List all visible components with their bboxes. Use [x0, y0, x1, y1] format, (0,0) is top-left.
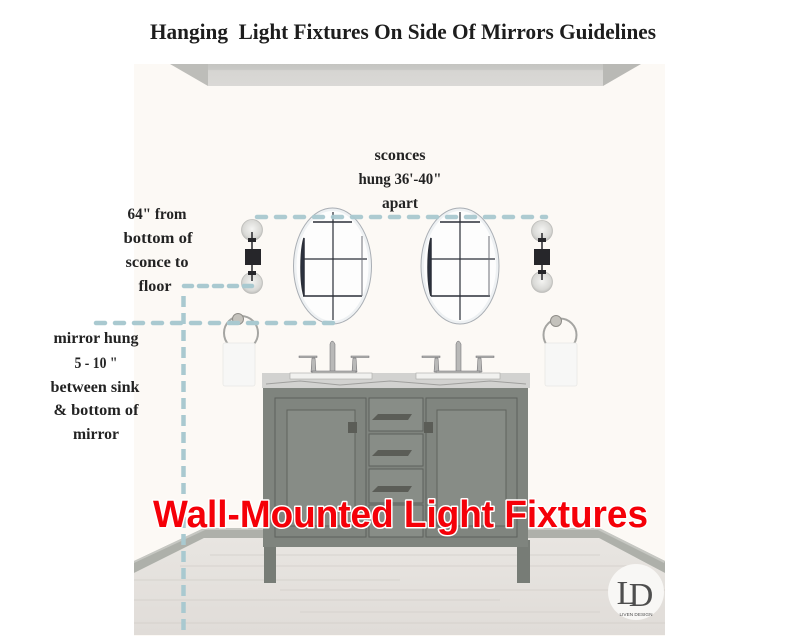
drawer pulls and door knobs	[348, 414, 433, 492]
right door	[426, 398, 517, 537]
callout: sconce height: sconce to	[126, 254, 188, 271]
measurement guide: sconce spacing dashed line	[257, 215, 546, 219]
baseboard	[134, 528, 665, 573]
callout: mirror height: mirror hung	[54, 330, 138, 347]
callout: sconce spacing: hung 36'-40"	[358, 171, 442, 188]
wall	[134, 64, 665, 636]
icon: left faucet	[299, 341, 369, 373]
title: Hanging Light Fixtures On Side Of Mirrors Guidelines	[150, 19, 656, 44]
callout: mirror height: between sink	[50, 379, 140, 396]
mirror: left	[294, 208, 372, 324]
icon: left towel ring	[223, 314, 258, 386]
icon: right sconce	[532, 220, 552, 292]
icon: Liven Design logo: D	[629, 577, 653, 614]
ceiling soffit	[170, 64, 641, 86]
overlay heading: Wall-Mounted Light Fixtures: Wall-Mounted Light Fixtures	[153, 494, 648, 536]
callout: sconce height: floor	[138, 278, 172, 295]
vanity	[262, 373, 530, 583]
drawers	[369, 398, 423, 537]
icon: Liven Design logo: LIVEN DESIGN	[620, 612, 652, 617]
callout: mirror height: mirror	[73, 426, 119, 443]
callout: sconce height: 64" from	[128, 206, 187, 223]
callout: sconce height	[124, 206, 193, 295]
infographic canvas	[50, 24, 665, 636]
floor	[134, 538, 665, 635]
callout: sconce height: bottom of	[124, 230, 193, 247]
callout: sconce spacing	[358, 147, 442, 212]
left door	[275, 398, 366, 537]
callout: mirror height: & bottom of	[54, 402, 139, 419]
vanity legs	[264, 540, 530, 583]
callout: mirror height: 5 - 10 "	[74, 355, 118, 372]
measurement guide: mirror height dashed line	[96, 321, 333, 325]
mirror: right	[421, 208, 499, 324]
vanity cabinet	[263, 387, 528, 547]
marble countertop	[262, 373, 530, 388]
icon: Liven Design logo: L	[617, 575, 637, 612]
callout: mirror height	[50, 330, 140, 443]
callout: sconce spacing: apart	[382, 195, 419, 212]
measurement guide: vertical dashed line to floor	[181, 296, 186, 634]
measurement guide: sconce height dashed line	[184, 284, 252, 288]
icon: Liven Design logo	[608, 564, 664, 620]
icon: right towel ring	[544, 316, 577, 386]
panel: room illustration	[134, 64, 665, 636]
icon: left sconce	[242, 220, 262, 294]
callout: sconce spacing: sconces	[374, 147, 426, 164]
icon: right faucet	[422, 341, 494, 373]
